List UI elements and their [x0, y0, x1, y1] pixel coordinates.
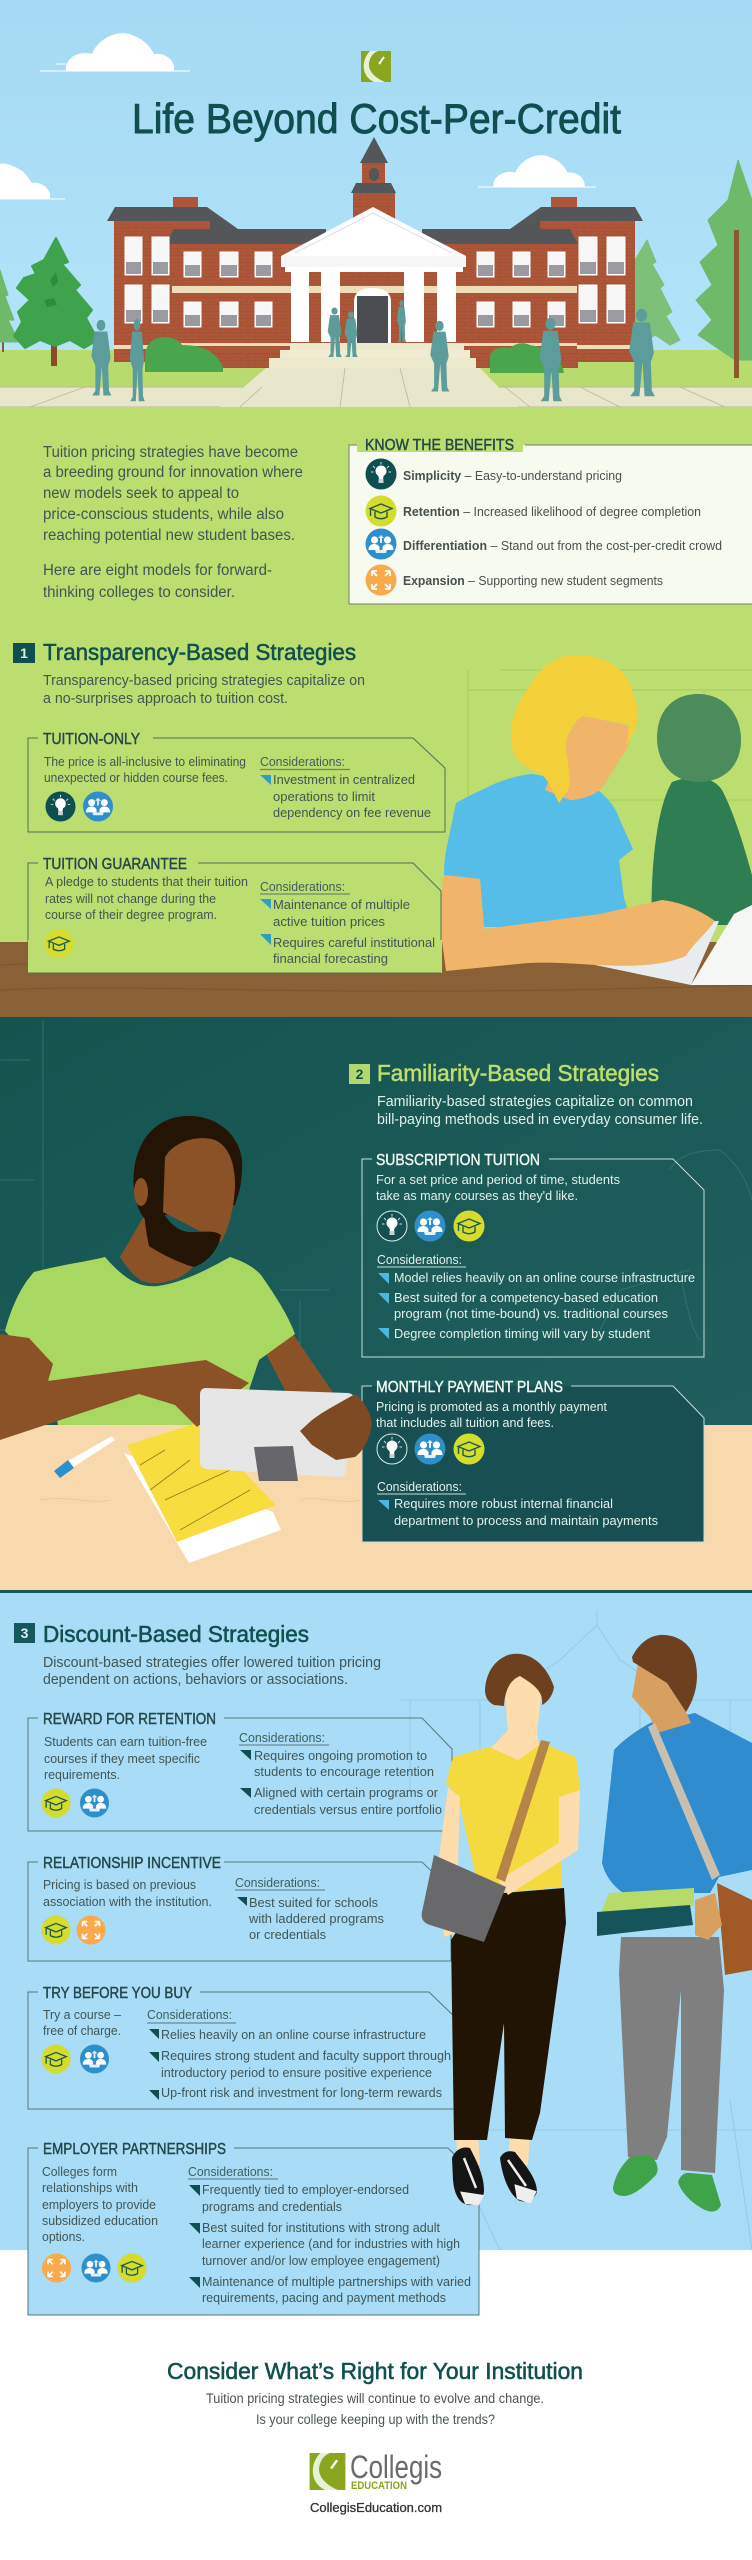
- tablet: [200, 1388, 354, 1477]
- papers: [124, 1423, 281, 1563]
- section 3 description: dependent on actions, behaviors or associations.: [43, 1672, 348, 1688]
- heading: know the benefits: KNOW THE BENEFITS: [365, 437, 514, 454]
- panel: hero campus scene: [0, 0, 752, 407]
- panel: know the benefits: [349, 437, 752, 604]
- section 1 description: Transparency-based pricing strategies capitalize on: [43, 673, 365, 689]
- heading: section 1: Transparency-Based Strategies: [43, 639, 356, 665]
- panel: subscription tuition: SUBSCRIPTION TUITION: [376, 1152, 540, 1169]
- considerations: [260, 754, 431, 820]
- considerations: credentials versus entire portfolio: [254, 1802, 442, 1817]
- description: Pricing is promoted as a monthly payment: [376, 1399, 607, 1414]
- pen: [54, 1436, 115, 1478]
- neck: [120, 1216, 206, 1283]
- description: rates will not change during the: [45, 891, 216, 906]
- icon: retention: [44, 929, 74, 958]
- intro text: reaching potential new student bases.: [43, 527, 295, 544]
- icon: expansion: [366, 564, 396, 596]
- considerations: Degree completion timing will vary by student: [394, 1326, 650, 1341]
- considerations: programs and credentials: [202, 2199, 342, 2214]
- considerations: Considerations:: [235, 1875, 320, 1890]
- intro text: Tuition pricing strategies have become: [43, 444, 298, 461]
- text: closing copy: [206, 2391, 544, 2427]
- text: closing copy: Is your college keeping up with the trends?: [256, 2412, 495, 2427]
- section 3 description: [43, 1655, 381, 1688]
- right arm: [262, 1334, 336, 1420]
- tree: far left small: [0, 270, 19, 352]
- hand: [300, 1394, 372, 1460]
- considerations: Maintenance of multiple partnerships with varied: [202, 2274, 471, 2289]
- considerations: [377, 1479, 658, 1528]
- considerations: Maintenance of multiple: [273, 897, 410, 912]
- wings: [107, 207, 643, 368]
- section 1 description: a no-surprises approach to tuition cost.: [43, 691, 288, 707]
- considerations: [188, 2164, 471, 2305]
- considerations: Considerations:: [260, 879, 345, 894]
- benefit icons: [42, 2253, 147, 2283]
- panel: relationship incentive: RELATIONSHIP INCENTIVE: [43, 1855, 221, 1872]
- description: [376, 1399, 607, 1430]
- considerations: introductory period to ensure positive experience: [161, 2065, 432, 2080]
- intro text: new models seek to appeal to: [43, 485, 239, 502]
- description: requirements.: [44, 1767, 120, 1782]
- icon: retention: [366, 496, 396, 526]
- phone: [254, 1446, 298, 1481]
- tower: [351, 137, 396, 223]
- panel: subscription tuition: [362, 1152, 704, 1357]
- benefit: differentiation: Differentiation – Stand out from the cost-per-credit crowd: [403, 538, 722, 553]
- title: Life Beyond Cost-Per-Credit: [132, 95, 621, 142]
- background student: [652, 694, 752, 925]
- considerations: Considerations:: [239, 1730, 325, 1745]
- icon: cloud right: [478, 155, 596, 187]
- section 2 description: [377, 1094, 703, 1128]
- considerations: requirements, pacing and payment methods: [202, 2290, 446, 2305]
- considerations: Up-front risk and investment for long-term rewards: [161, 2085, 442, 2100]
- section 1 description: [43, 673, 365, 707]
- benefit icons: [377, 1210, 484, 1242]
- considerations: [260, 879, 435, 966]
- illustration: two students: [422, 1635, 752, 2212]
- panel: try before you buy: [28, 1985, 458, 2109]
- portico: [269, 207, 476, 368]
- considerations: operations to limit: [273, 789, 375, 804]
- intro text: Here are eight models for forward-: [43, 562, 272, 579]
- tree: right of building: [635, 240, 680, 345]
- icon: simplicity: [366, 458, 396, 490]
- considerations: Best suited for institutions with strong adult: [202, 2220, 440, 2235]
- considerations: department to process and maintain payments: [394, 1513, 658, 1528]
- website: CollegisEducation.com: [310, 2500, 442, 2515]
- lawn and walkways: [0, 350, 752, 407]
- panel: try before you buy: TRY BEFORE YOU BUY: [43, 1985, 192, 2002]
- description: employers to provide: [42, 2197, 156, 2212]
- considerations: Requires ongoing promotion to: [254, 1748, 427, 1763]
- considerations: Model relies heavily on an online course infrastructure: [394, 1270, 695, 1285]
- hair: [511, 655, 638, 803]
- description: Try a course –: [43, 2007, 122, 2022]
- description: Pricing is based on previous: [43, 1877, 196, 1892]
- panel: tuition guarantee: TUITION GUARANTEE: [43, 856, 187, 873]
- intro text: a breeding ground for innovation where: [43, 464, 303, 481]
- description: [44, 1734, 207, 1782]
- description: Colleges form: [42, 2164, 117, 2179]
- heading: section 1: 1: [20, 645, 28, 661]
- heading: section 3: Discount-Based Strategies: [43, 1621, 309, 1647]
- logo: Collegis Education: Collegis: [350, 2449, 442, 2485]
- considerations: Requires more robust internal financial: [394, 1496, 613, 1511]
- considerations: Considerations:: [377, 1252, 462, 1267]
- description: [43, 2007, 122, 2038]
- tree: far right: [696, 160, 752, 378]
- description: [42, 2164, 158, 2244]
- illustration: woman at laptop: [440, 655, 752, 985]
- intro text: [43, 444, 303, 601]
- benefit icons: [377, 1434, 484, 1464]
- icon: differentiation: [366, 528, 396, 560]
- considerations: Relies heavily on an online course infrastructure: [161, 2027, 426, 2042]
- description: options.: [42, 2229, 85, 2244]
- benefit icons: [41, 1788, 109, 1818]
- description: A pledge to students that their tuition: [45, 874, 248, 889]
- considerations: Requires strong student and faculty support through: [161, 2048, 451, 2063]
- icon: Collegis logo mark: [361, 51, 391, 82]
- considerations: [377, 1252, 695, 1341]
- face: [134, 1138, 235, 1242]
- considerations: Requires careful institutional: [273, 935, 435, 950]
- tree: large left: [14, 238, 98, 366]
- considerations: Aligned with certain programs or: [254, 1785, 439, 1800]
- panel: section 2 background: [0, 1017, 752, 1593]
- benefit icons: [45, 791, 113, 822]
- windows: [125, 237, 625, 327]
- description: unexpected or hidden course fees.: [44, 770, 228, 785]
- considerations: with laddered programs: [248, 1911, 384, 1926]
- considerations: dependency on fee revenue: [273, 805, 431, 820]
- description: [376, 1172, 620, 1203]
- considerations: Considerations:: [188, 2164, 273, 2179]
- beard: [144, 1205, 221, 1267]
- building: [107, 137, 643, 368]
- arm and hand: [440, 875, 715, 971]
- panel: tuition-only: [28, 731, 445, 832]
- benefit: retention: Retention – Increased likelihood of degree completion: [403, 504, 701, 519]
- description: relationships with: [42, 2180, 138, 2195]
- heading: section 2: 2: [356, 1066, 364, 1082]
- description: subsidized education: [42, 2213, 158, 2228]
- woman student: [422, 1654, 580, 2205]
- intro text: thinking colleges to consider.: [43, 584, 235, 601]
- considerations: Best suited for a competency-based education: [394, 1290, 658, 1305]
- description: courses if they meet specific: [44, 1751, 200, 1766]
- considerations: Best suited for schools: [249, 1895, 378, 1910]
- benefit icons: [41, 1915, 106, 1945]
- logo: Collegis Education: [310, 2449, 442, 2492]
- considerations: or credentials: [249, 1927, 326, 1942]
- panel: reward for retention: REWARD FOR RETENTION: [43, 1711, 216, 1728]
- intro text: price-conscious students, while also: [43, 506, 284, 523]
- panel: section 3 background: [0, 1593, 752, 2560]
- shirt: [444, 774, 633, 927]
- section 2 description: bill-paying methods used in everyday consumer life.: [377, 1112, 703, 1128]
- considerations: Considerations:: [377, 1479, 462, 1494]
- panel: closing call to action: [167, 2358, 583, 2515]
- considerations: Considerations:: [147, 2007, 232, 2022]
- considerations: Investment in centralized: [273, 772, 415, 787]
- considerations: active tuition prices: [273, 914, 385, 929]
- panel: employer partnerships: EMPLOYER PARTNERSHIPS: [43, 2141, 226, 2158]
- description: free of charge.: [43, 2023, 121, 2038]
- panel: section 1 background: [0, 407, 752, 1017]
- description: that includes all tuition and fees.: [376, 1415, 554, 1430]
- considerations: students to encourage retention: [254, 1764, 434, 1779]
- heading: section 2: Familiarity-Based Strategies: [377, 1060, 659, 1086]
- considerations: [239, 1730, 442, 1817]
- considerations: program (not time-bound) vs. traditional courses: [394, 1306, 668, 1321]
- benefit: simplicity: Simplicity – Easy-to-understand pricing: [403, 468, 622, 483]
- panel: monthly payment plans: [362, 1379, 704, 1542]
- heading: section 3: 3: [21, 1625, 29, 1641]
- panel: reward for retention: [28, 1711, 452, 1831]
- considerations: [235, 1875, 384, 1942]
- description: Students can earn tuition-free: [44, 1734, 207, 1749]
- benefit icons: [41, 2044, 109, 2074]
- shrubs: [145, 337, 564, 373]
- description: For a set price and period of time, students: [376, 1172, 620, 1187]
- description: [44, 754, 246, 785]
- panel: employer partnerships: [28, 2141, 479, 2315]
- description: The price is all-inclusive to eliminating: [44, 754, 246, 769]
- benefit: expansion: Expansion – Supporting new student segments: [403, 573, 663, 588]
- laptop: [542, 905, 752, 985]
- considerations: turnover and/or low employee engagement): [202, 2253, 440, 2268]
- section 2 description: Familiarity-based strategies capitalize on common: [377, 1094, 693, 1110]
- considerations: [147, 2007, 451, 2100]
- panel: tuition-only: TUITION-ONLY: [43, 731, 140, 748]
- illustration: man with tablet: [0, 1116, 372, 1563]
- section 3 description: Discount-based strategies offer lowered tuition pricing: [43, 1655, 381, 1671]
- students silhouettes: [91, 300, 655, 401]
- logo: Collegis Education: EDUCATION: [351, 2480, 407, 2492]
- left arm: [0, 1334, 249, 1440]
- icon: cloud top left: [40, 33, 190, 71]
- panel: monthly payment plans: MONTHLY PAYMENT PLANS: [376, 1379, 563, 1396]
- description: course of their degree program.: [45, 907, 217, 922]
- considerations: financial forecasting: [273, 951, 388, 966]
- description: [43, 1877, 212, 1909]
- description: association with the institution.: [43, 1894, 212, 1909]
- panel: tuition guarantee: [28, 856, 442, 973]
- description: [45, 874, 248, 922]
- heading: Consider What’s Right for Your Institution: [167, 2358, 583, 2384]
- panel: relationship incentive: [28, 1855, 451, 1961]
- man student: [597, 1635, 752, 2212]
- considerations: learner experience (and for industries with high: [202, 2236, 460, 2251]
- text: closing copy: Tuition pricing strategies will continue to evolve and change.: [206, 2391, 544, 2406]
- chimneys: [173, 197, 577, 208]
- hair: [133, 1116, 242, 1225]
- considerations: Frequently tied to employer-endorsed: [202, 2182, 409, 2197]
- shirt: [5, 1257, 295, 1425]
- considerations: Considerations:: [260, 754, 345, 769]
- description: take as many courses as they'd like.: [376, 1188, 578, 1203]
- face: [545, 715, 631, 800]
- icon: cloud left edge: [0, 164, 65, 199]
